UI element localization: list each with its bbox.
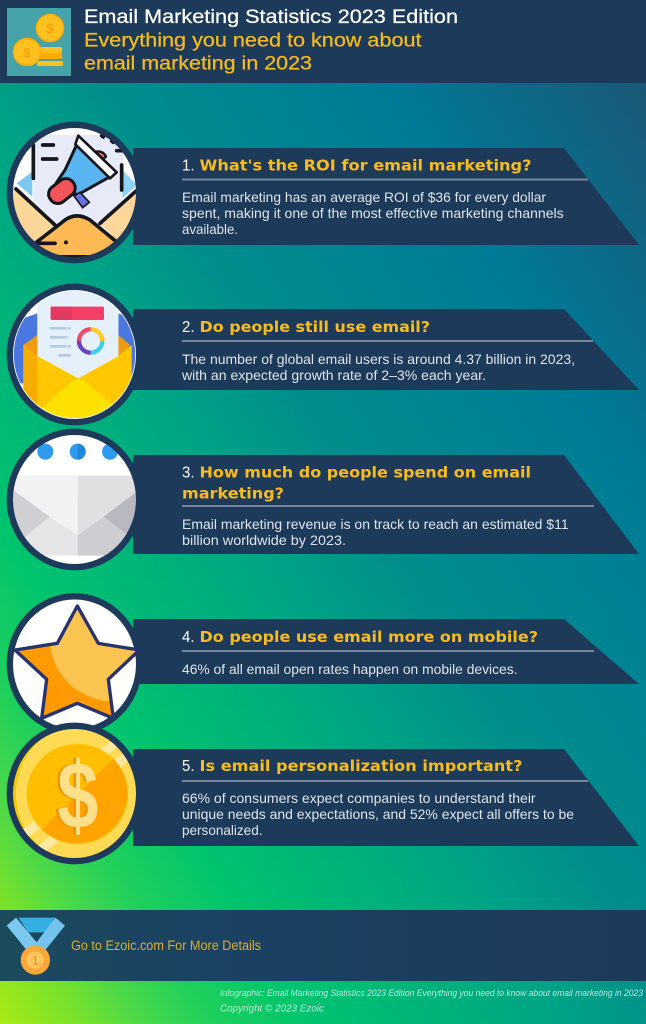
text block: spend answer: Email marketing revenue is on track to reach an estimated $11 [182,516,569,532]
text block: ROI answer: available. [182,221,238,237]
panel: spend [133,455,639,554]
panel: spend: 3. [182,464,194,482]
heading: ROI question: What's the ROI for email marketing? [200,156,532,174]
text block: personalization answer [182,790,574,838]
icon: medal: 1 [32,953,39,967]
text block: users answer: The number of global email users is around 4.37 billion in 2023, [182,351,575,367]
header band [0,0,646,83]
text block: ROI answer: spent, making it one of the most effective marketing channels [182,205,564,221]
text block: personalization answer: 66% of consumers expect companies to understand their [182,790,536,806]
icon: megaphone in envelope [10,125,140,262]
heading: spend question: marketing? [182,484,284,502]
icon: medal [7,918,65,975]
text block: users answer [181,351,575,383]
subtitle [84,30,422,74]
icon: star [6,593,141,729]
panel: ROI: 1. [182,158,194,174]
panel: personalization [133,749,639,846]
heading: spend question: How much do people spend on email [200,464,531,482]
text block: personalization answer: unique needs and expectations, and 52% expect all offers to be [182,806,574,822]
panel: email users [133,309,639,390]
heading: spend question [182,464,531,502]
subtitle: email marketing in 2023 [84,54,312,74]
subtitle: Everything you need to know about [84,30,422,52]
icon: gold dollar coin: $ [57,743,98,849]
icon: gold dollar coin [10,726,141,861]
heading: mobile question: Do people use email more on mobile? [200,628,538,646]
text block: ROI answer [182,189,564,237]
text block: spend answer: billion worldwide by 2023. [182,532,346,548]
heading: personalization question: Is email personalization important? [200,757,522,775]
icon: gold coins: $ [46,21,54,36]
text block: users answer: with an expected growth rate of 2–3% each year. [181,367,486,383]
footer band [0,910,646,981]
icon: grey envelope with dots [8,432,143,567]
panel: personalization: 5. [182,758,194,775]
panel: ROI [133,148,639,245]
panel: email users: 2. [182,319,194,336]
text block: spend answer [182,516,569,548]
link text: Go to Ezoic.com For More Details [71,938,261,953]
text block: ROI answer: Email marketing has an average ROI of $36 for every dollar [182,189,546,205]
icon: gold coins [7,8,71,76]
text block: personalization answer: personalized. [182,822,262,838]
panel: mobile: 4. [182,629,194,646]
text block: mobile answer: 46% of all email open rates happen on mobile devices. [182,661,518,677]
credit text [220,988,644,1014]
icon: gold coins: $ [23,45,31,60]
title: Email Marketing Statistics 2023 Edition [84,7,458,28]
icon: gold dollar coin: $ [55,743,96,849]
heading: users question: Do people still use email? [200,318,430,336]
panel: mobile [133,619,639,684]
icon: yellow envelope with report [10,287,140,423]
credit text: Copyright © 2023 Ezoic [220,1004,324,1014]
